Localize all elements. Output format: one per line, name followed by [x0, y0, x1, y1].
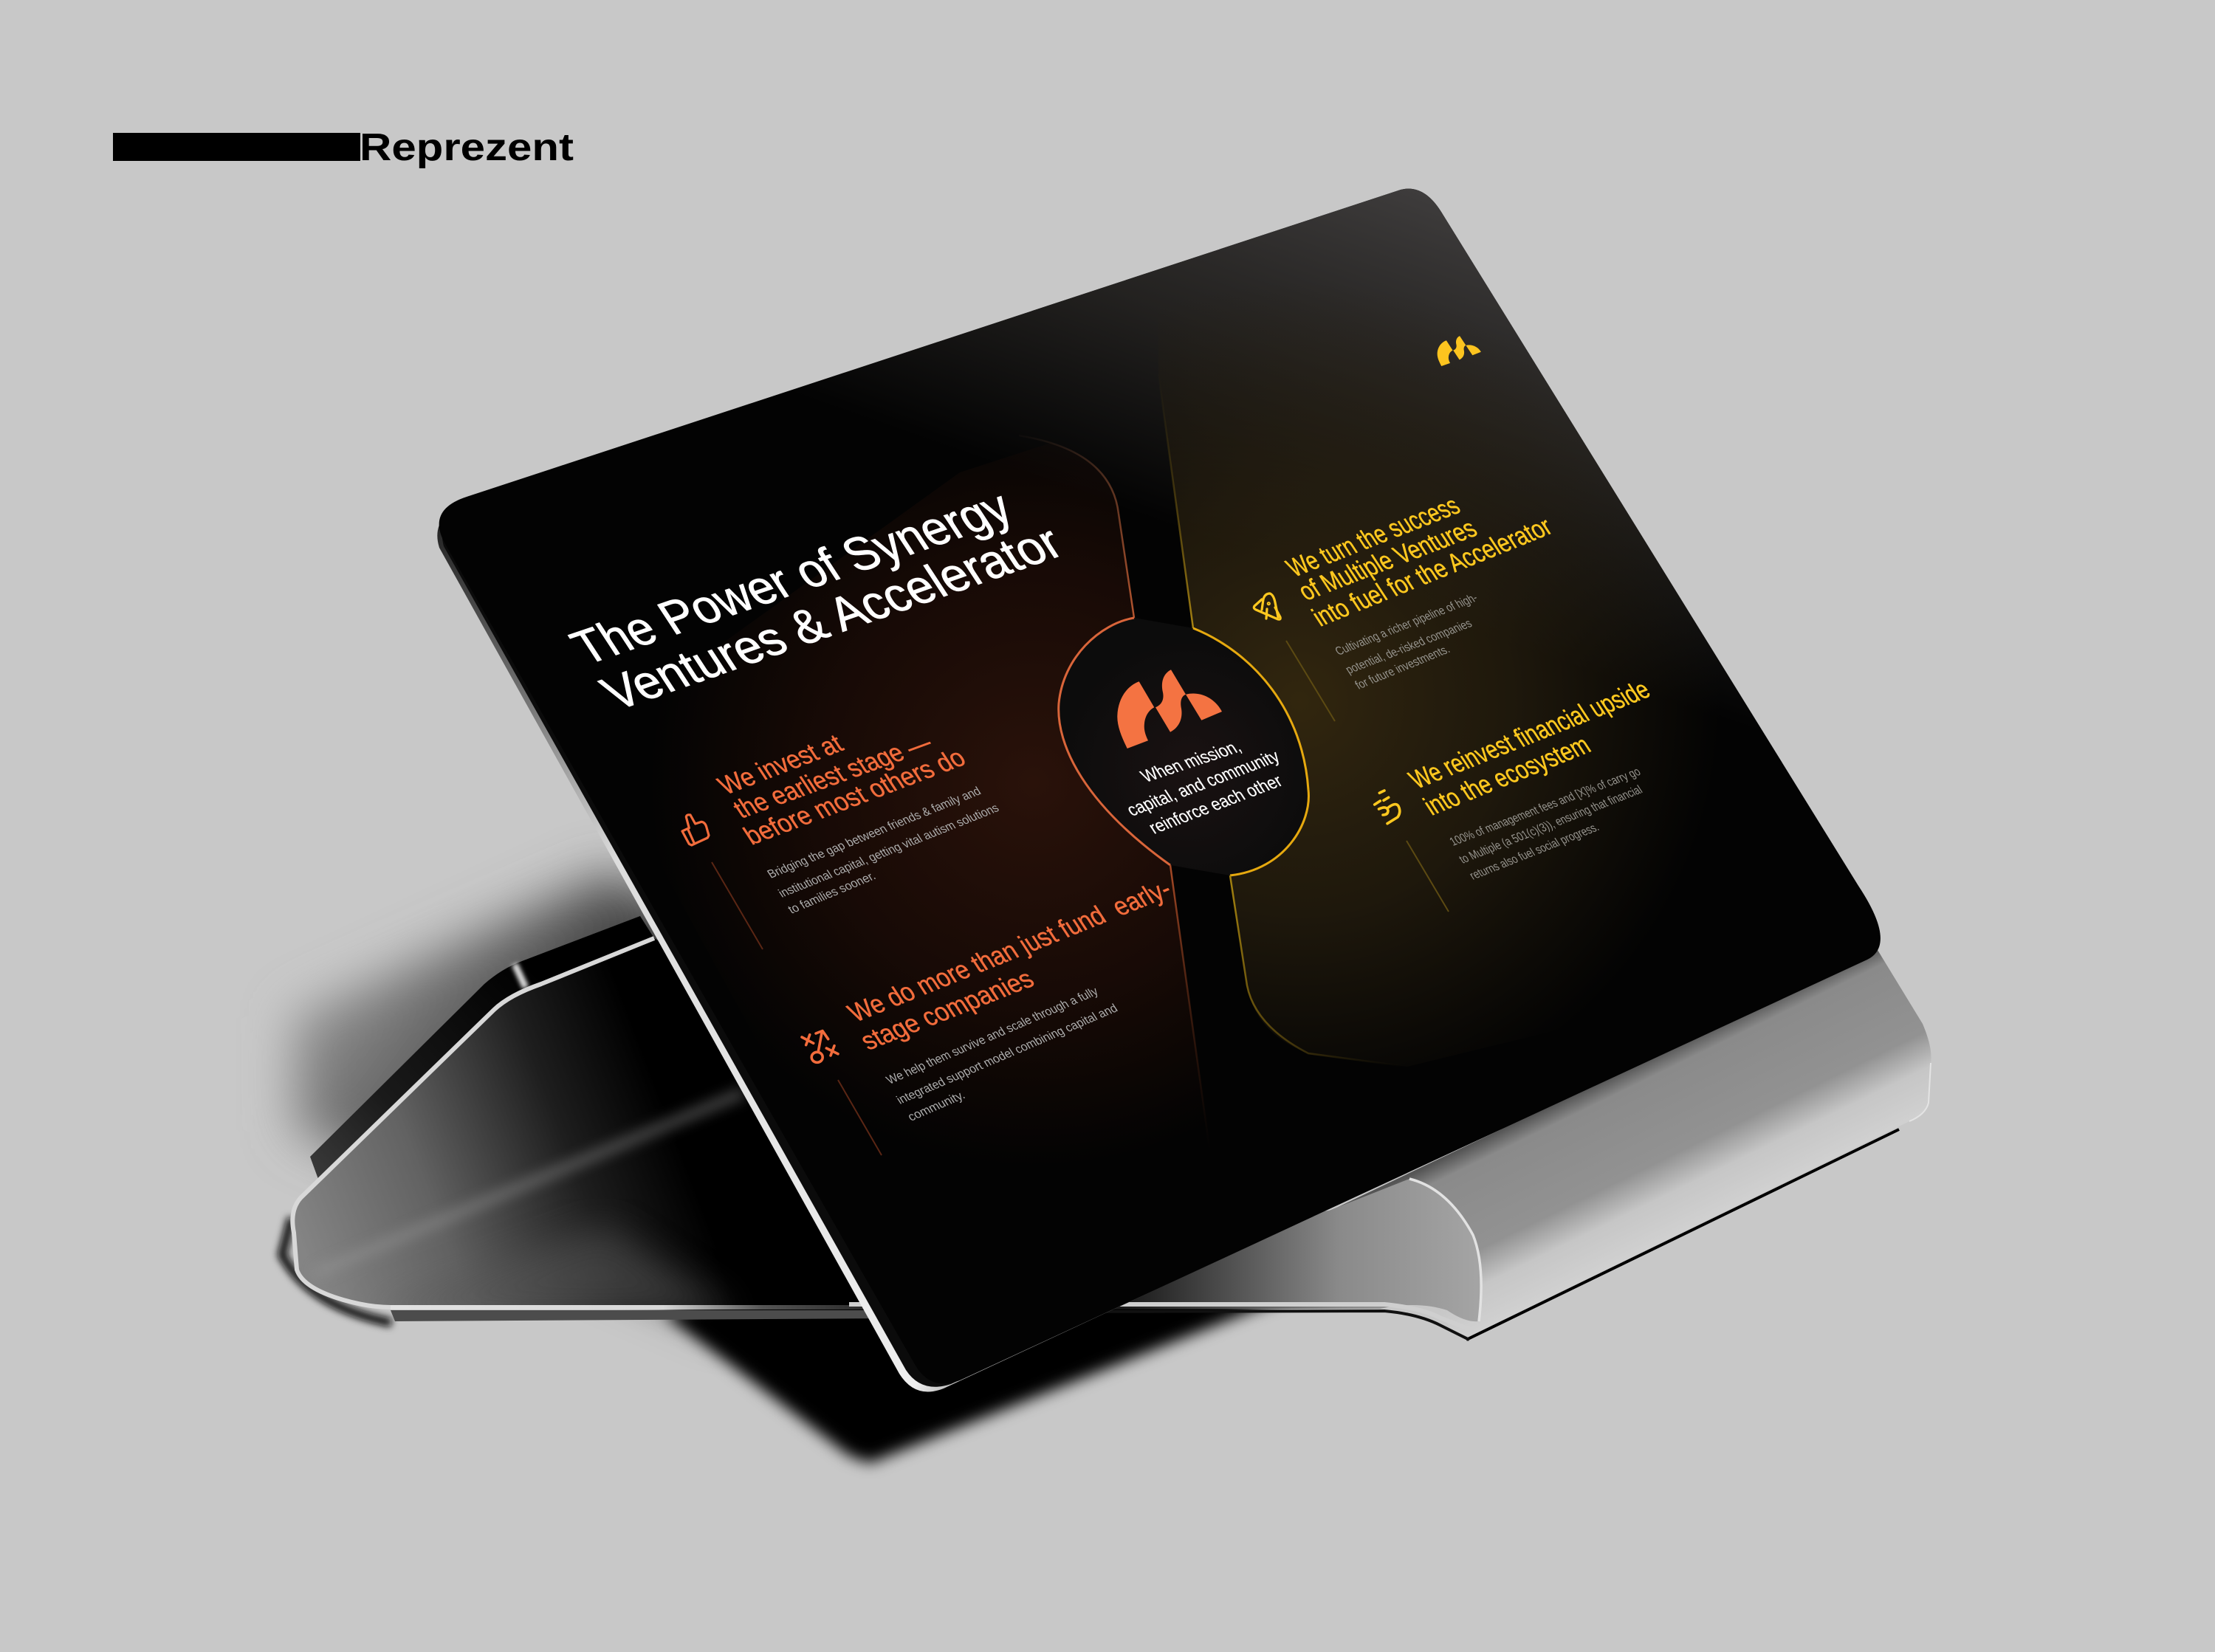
title: The Power of Synergy	[560, 480, 1023, 675]
brand wordmark	[113, 126, 574, 169]
heading: We turn the success	[1280, 490, 1466, 582]
heading: We reinvest financial upside	[1403, 675, 1655, 794]
top-right sheen	[867, 189, 1721, 664]
stand: front wing	[290, 936, 868, 1321]
screen rim	[437, 502, 1853, 1392]
stand: right base	[849, 950, 1931, 1340]
stand: rear plate	[310, 916, 654, 1181]
brand wordmark: Reprezent	[360, 126, 574, 169]
body text: potential, de-risked companies	[1343, 616, 1474, 676]
body text: for future investments.	[1353, 642, 1452, 692]
inner curl	[923, 1179, 1481, 1321]
heading	[1403, 675, 1655, 821]
heading: of Multiple Ventures	[1292, 513, 1483, 606]
item: invest early	[682, 727, 1001, 949]
left panel fill	[716, 468, 1195, 1100]
item: reinvest upside	[1375, 675, 1655, 912]
heading: before most others do	[738, 743, 971, 850]
heading: stage companies	[854, 963, 1040, 1056]
body text: We help them survive and scale through a fully	[884, 985, 1101, 1087]
icon: rocket	[1254, 593, 1280, 619]
central hub disc	[1059, 618, 1308, 875]
body text: to Multiple (a 501(c)(3)), ensuring that financial	[1457, 783, 1645, 866]
icon: strategy play	[802, 1030, 838, 1062]
silver edge	[292, 938, 654, 1307]
heading: into the ecosystem	[1418, 730, 1596, 821]
body text: 100% of management fees and [X]% of carry go	[1447, 765, 1643, 848]
heading: We do more than just fund early-	[842, 874, 1177, 1028]
item: success fuels accelerator	[1254, 490, 1557, 721]
center statement: capital, and community	[1123, 746, 1284, 820]
body text: Cultivating a richer pipeline of high-	[1333, 591, 1480, 658]
icon: thumbs up	[682, 815, 709, 845]
item: more than fund	[802, 874, 1177, 1155]
small logo top right	[1438, 336, 1481, 366]
center statement: reinforce each other	[1145, 771, 1286, 838]
right panel outline	[1162, 404, 1379, 1063]
body text: integrated support model combining capital and	[894, 1002, 1120, 1107]
heading: We invest at	[712, 729, 849, 800]
body text: to families sooner.	[786, 869, 879, 916]
body text: community.	[905, 1088, 968, 1123]
icon: hand with coins	[1375, 791, 1400, 824]
center statement: When mission,	[1137, 737, 1245, 786]
heading	[842, 874, 1177, 1056]
left panel outline	[1028, 437, 1206, 1118]
body text: institutional capital, getting vital autism solutions	[776, 801, 1001, 900]
body text	[1333, 591, 1480, 692]
body text: returns also fuel social progress.	[1467, 820, 1601, 882]
right panel fill	[1165, 415, 1658, 1057]
title: Ventures & Accelerator	[591, 514, 1072, 720]
heading: into fuel for the Accelerator	[1306, 512, 1557, 632]
cast shadow	[282, 871, 1299, 1463]
heading: the earliest stage —	[727, 727, 938, 824]
screen panel	[439, 189, 1881, 1383]
body text: Bridging the gap between friends & family and	[765, 785, 983, 881]
under strip	[391, 1310, 886, 1321]
body text	[1447, 765, 1645, 882]
center logo	[1117, 670, 1222, 748]
